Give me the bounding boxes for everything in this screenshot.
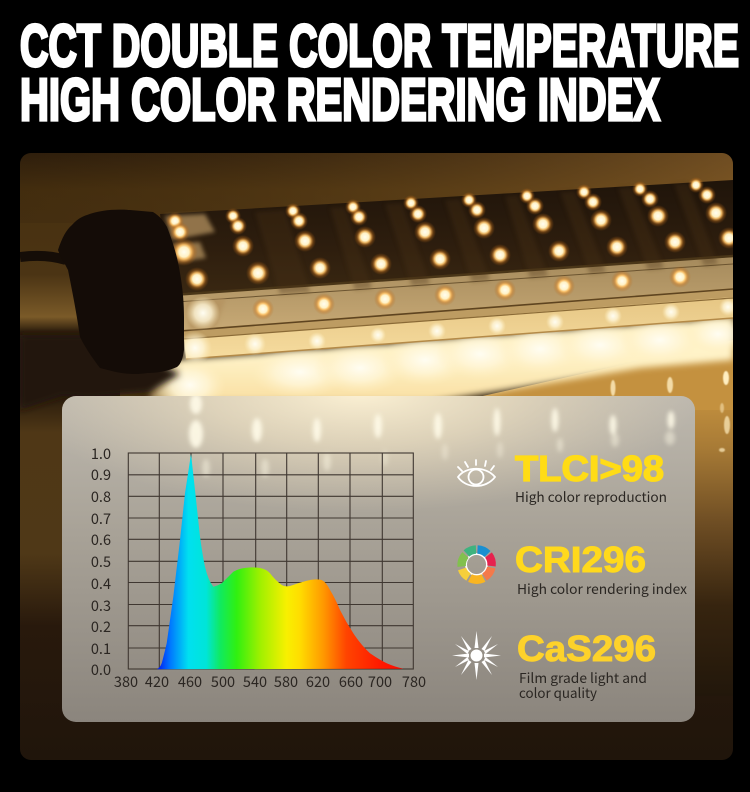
spectrum chart	[91, 443, 426, 692]
floor hot spots	[158, 318, 733, 396]
y axis labels: 0.6	[91, 529, 111, 550]
title	[20, 13, 739, 133]
CRI spec: High color rendering index	[517, 578, 687, 598]
icon: color wheel	[462, 550, 492, 580]
x axis labels: 700	[368, 671, 392, 692]
power cable	[20, 256, 66, 260]
cap shadow on floor	[20, 335, 180, 410]
icon: light burst	[452, 631, 501, 680]
y axis labels: 0.8	[91, 486, 111, 507]
golden floor band	[483, 340, 733, 397]
CaS spec: Film grade light and	[519, 667, 647, 687]
y axis labels: 0.7	[91, 508, 111, 529]
wet floor glints	[610, 371, 730, 452]
x axis labels: 420	[145, 671, 169, 692]
tube body	[160, 180, 733, 359]
CRI spec	[515, 539, 687, 598]
x axis labels: 620	[306, 671, 330, 692]
CaS spec: color quality	[519, 682, 597, 702]
dark tube reflections between LEDs	[255, 183, 718, 294]
y axis labels: 0.0	[91, 659, 111, 680]
x axis labels: 460	[178, 671, 202, 692]
glowing floor	[120, 318, 733, 402]
LED lights	[166, 177, 740, 320]
panel: LED tube photo	[20, 153, 750, 760]
tube left reflective patches	[165, 214, 226, 330]
x axis labels	[114, 671, 426, 692]
y axis labels: 0.9	[91, 464, 111, 485]
x axis labels: 580	[274, 671, 298, 692]
x axis labels: 500	[211, 671, 235, 692]
y axis labels	[91, 443, 111, 680]
y axis labels: 1.0	[91, 443, 111, 464]
chart grid	[128, 453, 413, 669]
icon: eye	[458, 460, 495, 486]
CRI spec: CRI296	[515, 539, 646, 580]
TLCI spec	[515, 448, 667, 506]
panel: translucent spec card	[62, 394, 695, 722]
x axis labels: 660	[339, 671, 363, 692]
y axis labels: 0.3	[91, 595, 111, 616]
tube end cap	[58, 210, 184, 374]
water reflections	[189, 394, 675, 477]
right strip of wet floor	[695, 410, 733, 635]
y axis labels: 0.4	[91, 573, 111, 594]
y axis labels: 0.2	[91, 616, 111, 637]
x axis labels: 780	[402, 671, 426, 692]
y axis labels: 0.1	[91, 638, 111, 659]
CaS spec: CaS296	[517, 628, 656, 669]
soft lower LED row	[178, 296, 737, 365]
spectrum curve	[157, 454, 403, 669]
x axis labels: 380	[114, 671, 138, 692]
TLCI spec: High color reproduction	[515, 486, 667, 506]
y axis labels: 0.5	[91, 551, 111, 572]
x axis labels: 540	[243, 671, 267, 692]
CaS spec	[517, 628, 656, 702]
TLCI spec: TLCI>98	[515, 448, 664, 489]
